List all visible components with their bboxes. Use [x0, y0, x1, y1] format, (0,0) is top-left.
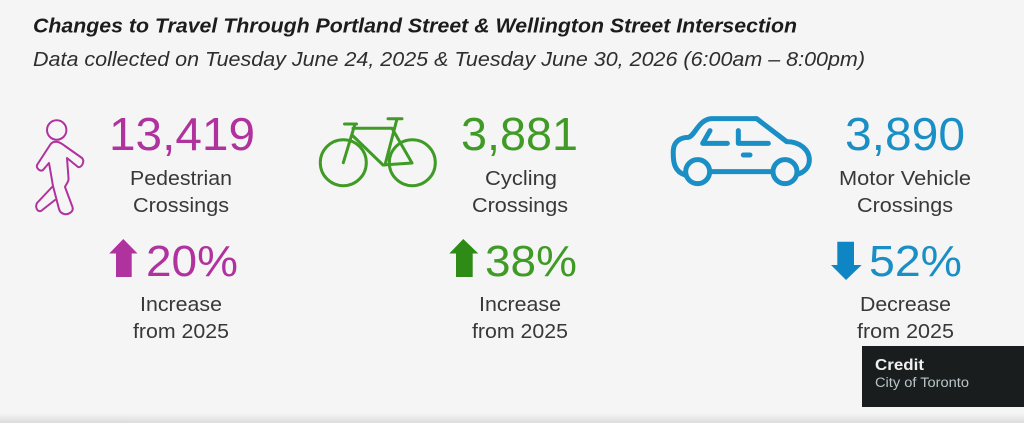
panel: cycling [320, 108, 578, 343]
title: Changes to Travel Through Portland Street & Wellington Street Intersection [33, 16, 797, 38]
credit box [862, 346, 1024, 407]
label: cycling crossings: Cycling [485, 167, 557, 190]
icon: car [673, 119, 809, 184]
stat: 38%: 38% [485, 237, 577, 286]
label: cycling crossings [472, 167, 568, 217]
arrow: up [449, 239, 478, 277]
label: increase from 2025: from 2025 [133, 320, 229, 343]
icon: pedestrian [36, 120, 83, 214]
arrow: up [109, 239, 138, 277]
panel: motor vehicle [673, 108, 971, 343]
credit box: City of Toronto [875, 375, 969, 390]
credit box: Credit [875, 357, 924, 374]
label: increase from 2025 [133, 293, 229, 343]
label: pedestrian crossings: Pedestrian [130, 167, 232, 190]
label: increase from 2025: Increase [140, 293, 222, 316]
label: cycling crossings: Crossings [472, 194, 568, 217]
label: decrease from 2025 [857, 293, 954, 343]
label: motor vehicle crossings [839, 167, 971, 217]
label: decrease from 2025: Decrease [860, 293, 951, 316]
label: motor vehicle crossings: Motor Vehicle [839, 167, 971, 190]
panel: pedestrian [36, 108, 255, 343]
icon: bicycle [320, 119, 435, 186]
label: increase from 2025: Increase [479, 293, 561, 316]
label: decrease from 2025: from 2025 [857, 320, 954, 343]
stat: 3,881: 3,881 [461, 108, 578, 160]
stat: 52%: 52% [869, 237, 962, 286]
label: pedestrian crossings: Crossings [133, 194, 229, 217]
subtitle: data collection dates: Data collected on Tuesday June 24, 2025 & Tuesday June 30, 2026 (6:00am – 8:00pm) [33, 49, 865, 71]
label: pedestrian crossings [130, 167, 232, 217]
label: motor vehicle crossings: Crossings [857, 194, 953, 217]
label: increase from 2025: from 2025 [472, 320, 568, 343]
stat: 13,419: 13,419 [109, 108, 255, 160]
label: increase from 2025 [472, 293, 568, 343]
stat: 20%: 20% [146, 237, 238, 286]
arrow: down [831, 242, 862, 280]
stat: 3,890: 3,890 [845, 108, 965, 160]
